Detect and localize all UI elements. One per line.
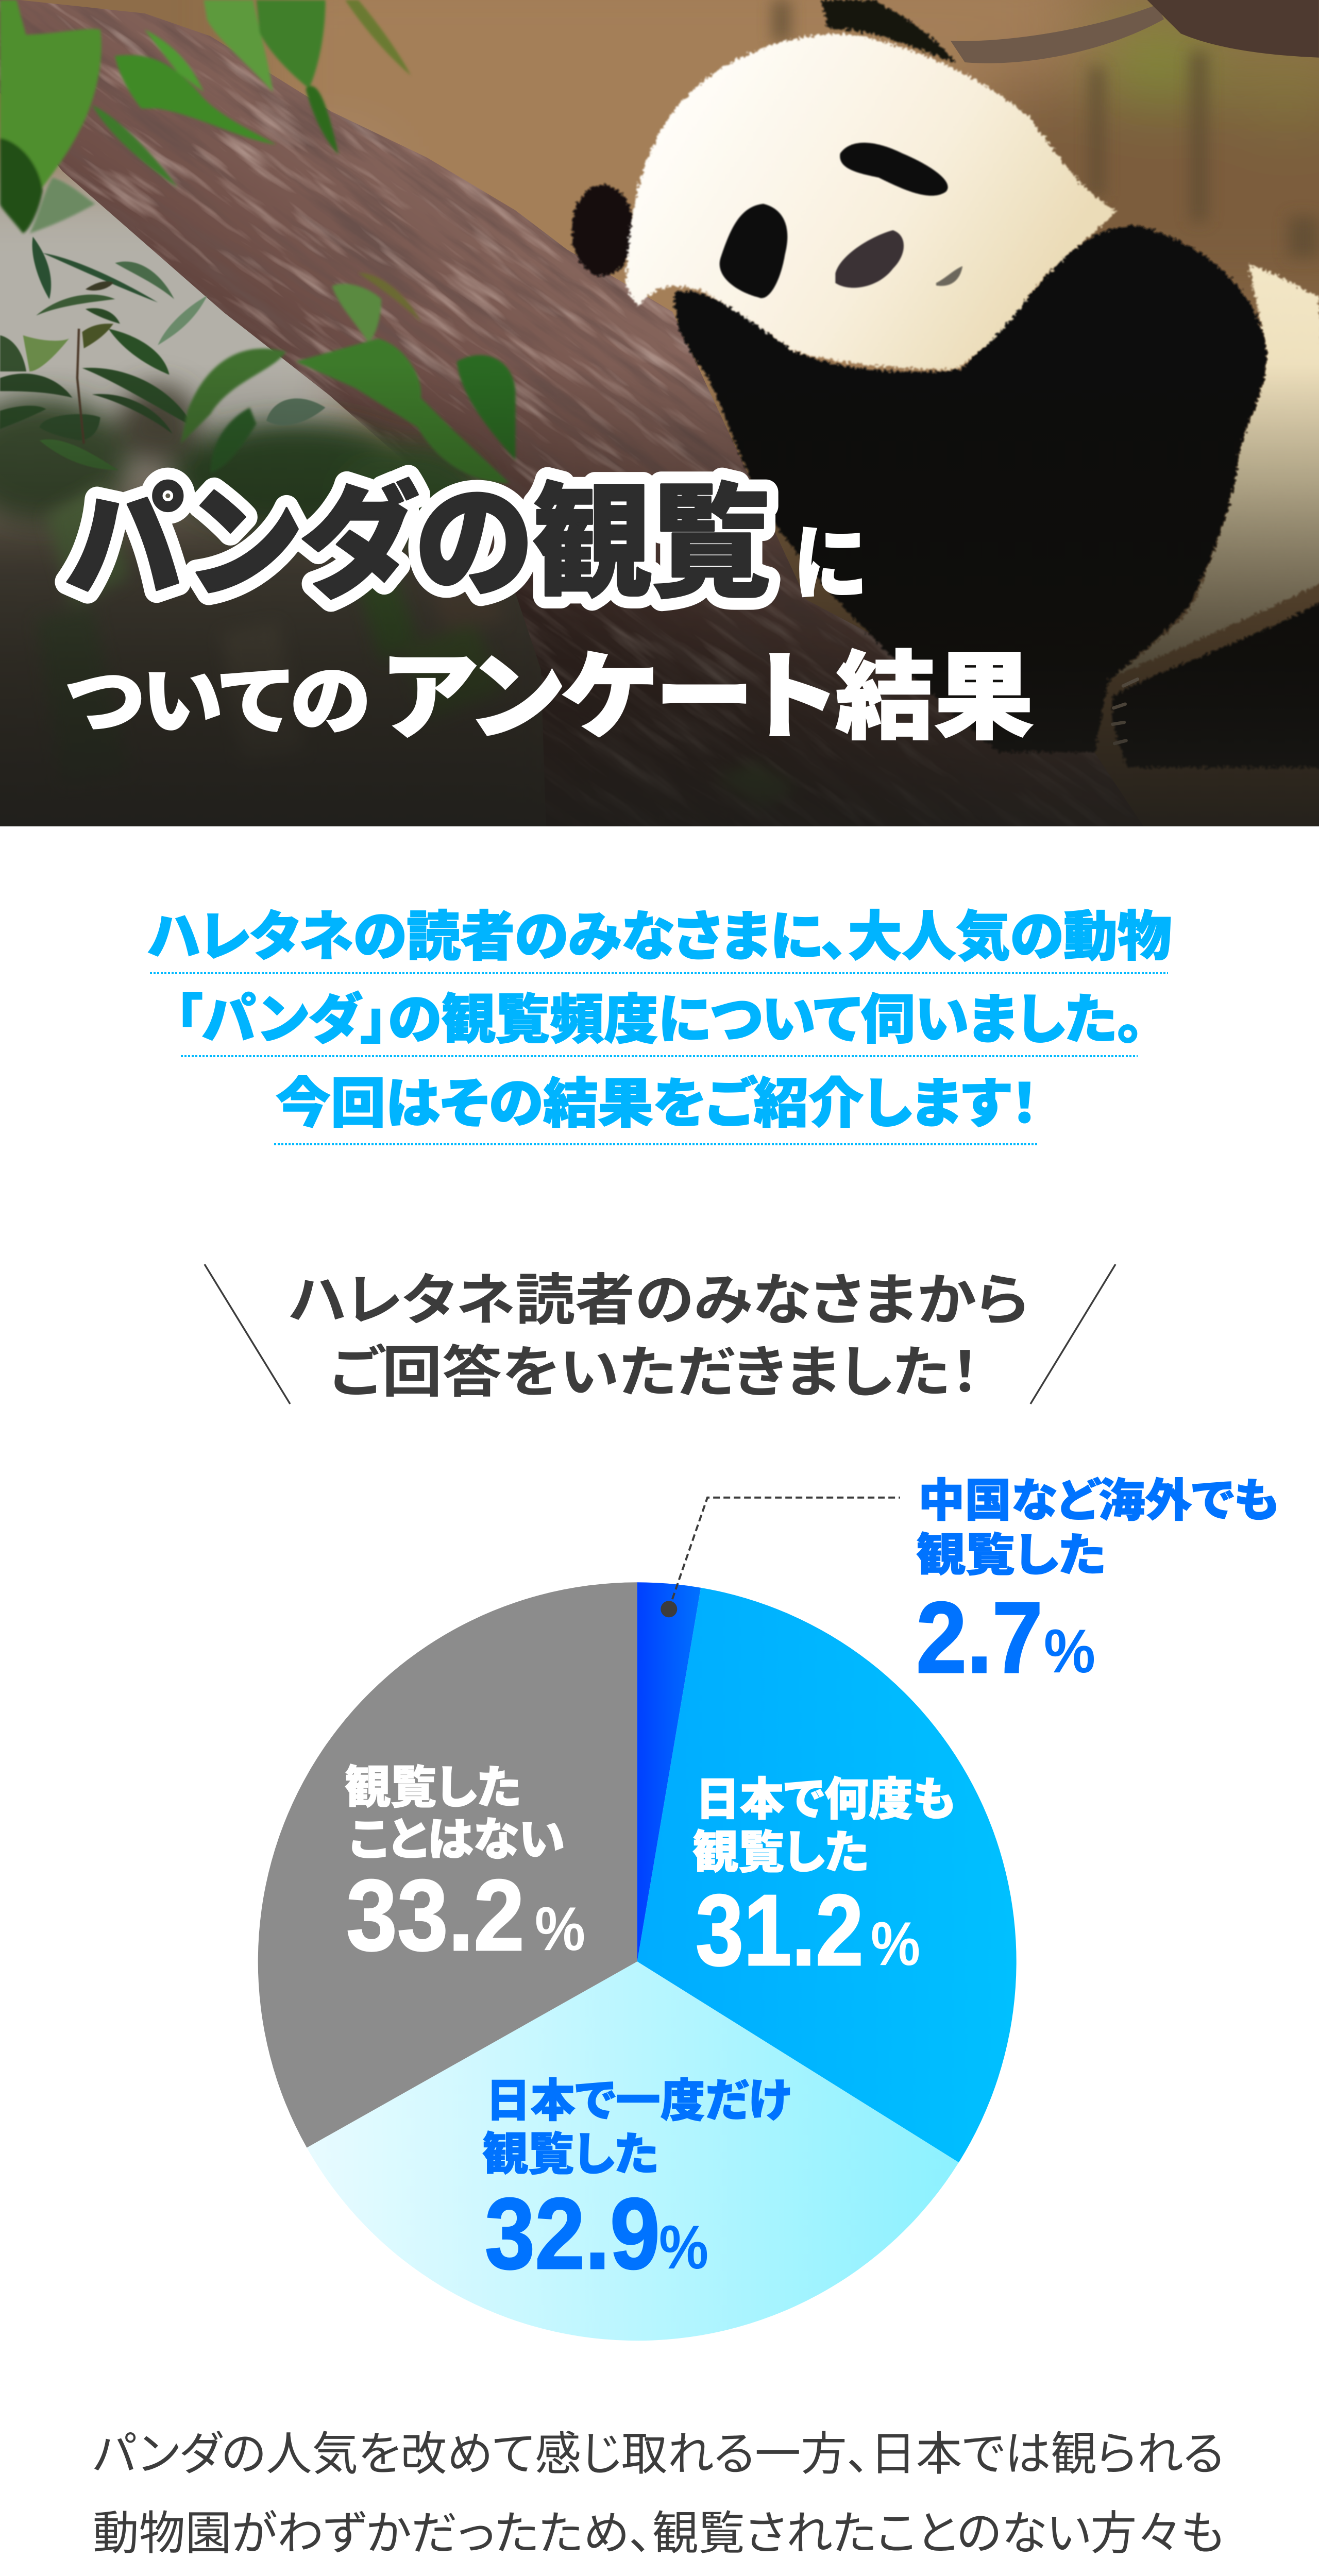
leaves and foliage xyxy=(0,0,515,543)
panda ears xyxy=(571,0,955,276)
closing paragraph 1 xyxy=(93,2416,1224,2576)
hero photo: panda sleeping on a tree xyxy=(0,0,1319,826)
pie chart xyxy=(258,1582,1017,2341)
panda xyxy=(571,0,1319,768)
label: once in Japan 32.9%: 観覧した xyxy=(482,2118,658,2183)
label: many times in Japan 31.2% xyxy=(692,1763,955,1987)
label: never 33.2%: % xyxy=(535,1894,585,1963)
hero title line 2: アンケート結果 xyxy=(383,619,1034,758)
closing paragraph 1: パンダの人気を改めて感じ取れる一方、日本では観られる xyxy=(93,2416,1224,2483)
respondents heading with slanted lines xyxy=(205,1256,1115,1408)
label: once in Japan 32.9% xyxy=(482,2064,791,2290)
label: many times in Japan 31.2%: 日本で何度も xyxy=(696,1763,955,1828)
hero title line 2: ついての xyxy=(66,641,370,750)
hero title line 1: パンダの観覧 xyxy=(66,444,771,622)
label: overseas 2.7%: 2.7 xyxy=(916,1581,1043,1694)
label: overseas 2.7%: 観覧した xyxy=(916,1519,1106,1584)
panda nose xyxy=(835,230,904,288)
label: many times in Japan 31.2%: 観覧した xyxy=(692,1816,869,1882)
label: overseas 2.7%: % xyxy=(1044,1617,1095,1686)
callout leader line with dot xyxy=(661,1498,900,1617)
closing paragraph 1: 動物園がわずかだったため、観覧されたことのない方々も xyxy=(93,2496,1224,2563)
label: once in Japan 32.9%: 日本で一度だけ xyxy=(486,2064,791,2130)
label: many times in Japan 31.2%: % xyxy=(871,1909,920,1978)
hero title line 2 xyxy=(66,619,1034,758)
label: never 33.2%: 33.2 xyxy=(346,1859,525,1972)
tree trunk xyxy=(0,0,973,801)
branches at top right xyxy=(951,0,1319,63)
panda eye patches xyxy=(720,143,962,298)
panda head xyxy=(626,33,1116,369)
panda paw claws xyxy=(1112,679,1138,743)
label: overseas 2.7% xyxy=(916,1464,1279,1694)
intro text with dotted underlines: 「パンダ」の観覧頻度について伺いました。 xyxy=(175,976,1144,1054)
panda body xyxy=(1113,264,1319,676)
label: never 33.2%: ことはない xyxy=(349,1803,565,1869)
intro text with dotted underlines: 今回はその結果をご紹介します！ xyxy=(276,1060,1038,1138)
respondents heading with slanted lines: ハレタネ読者のみなさまから xyxy=(289,1256,1028,1336)
label: once in Japan 32.9%: 32.9 xyxy=(485,2177,660,2290)
intro text with dotted underlines xyxy=(148,893,1172,1144)
hero title line 1: パンダの観覧 xyxy=(66,444,771,622)
intro text with dotted underlines: ハレタネの読者のみなさまに、大人気の動物 xyxy=(148,893,1172,971)
label: never 33.2% xyxy=(345,1751,585,1972)
label: many times in Japan 31.2%: 31.2 xyxy=(696,1874,864,1987)
label: once in Japan 32.9%: % xyxy=(659,2213,708,2282)
label: never 33.2%: 観覧した xyxy=(345,1751,521,1817)
hero title line 1: に xyxy=(793,497,866,617)
label: overseas 2.7%: 中国など海外でも xyxy=(918,1464,1279,1530)
bottom darkening gradient xyxy=(0,0,1319,826)
respondents heading with slanted lines: ご回答をいただきました！ xyxy=(330,1328,980,1408)
